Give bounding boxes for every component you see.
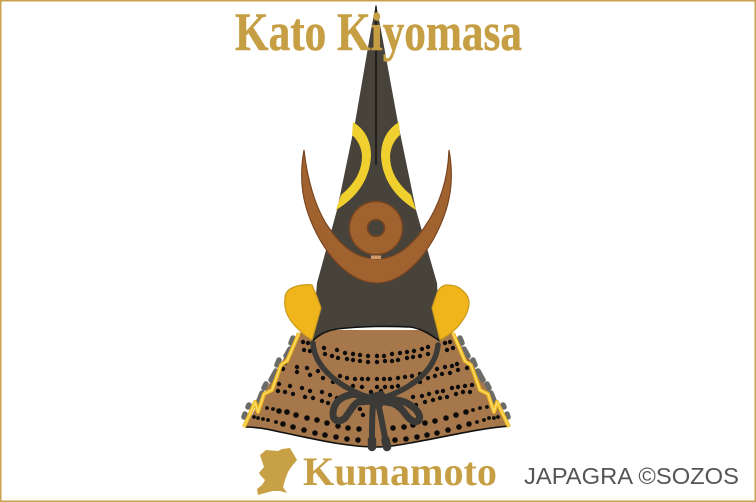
center ridge line bbox=[375, 6, 377, 165]
brow line bbox=[312, 326, 440, 341]
icon: Kumamoto prefecture silhouette bbox=[257, 448, 297, 495]
lacing dots bbox=[254, 342, 498, 440]
credit line: JAPAGRA ©SOZOS bbox=[524, 463, 739, 489]
right side strip bbox=[453, 333, 509, 427]
tall helmet bowl bbox=[312, 4, 440, 341]
left side strip bbox=[244, 333, 299, 427]
crescent horns bbox=[302, 150, 451, 283]
center ring crest bbox=[350, 202, 402, 259]
left yellow crescent bbox=[336, 122, 371, 210]
title: Kato Kiyomasa bbox=[235, 2, 522, 62]
chin cords and knot bbox=[313, 343, 438, 447]
place name: Kumamoto bbox=[303, 449, 497, 494]
illustration: kabuto helmet bbox=[244, 4, 510, 447]
right ear flap bbox=[432, 285, 469, 340]
right yellow crescent bbox=[381, 122, 416, 210]
neck guard bbox=[245, 330, 510, 447]
left ear flap bbox=[285, 285, 321, 340]
